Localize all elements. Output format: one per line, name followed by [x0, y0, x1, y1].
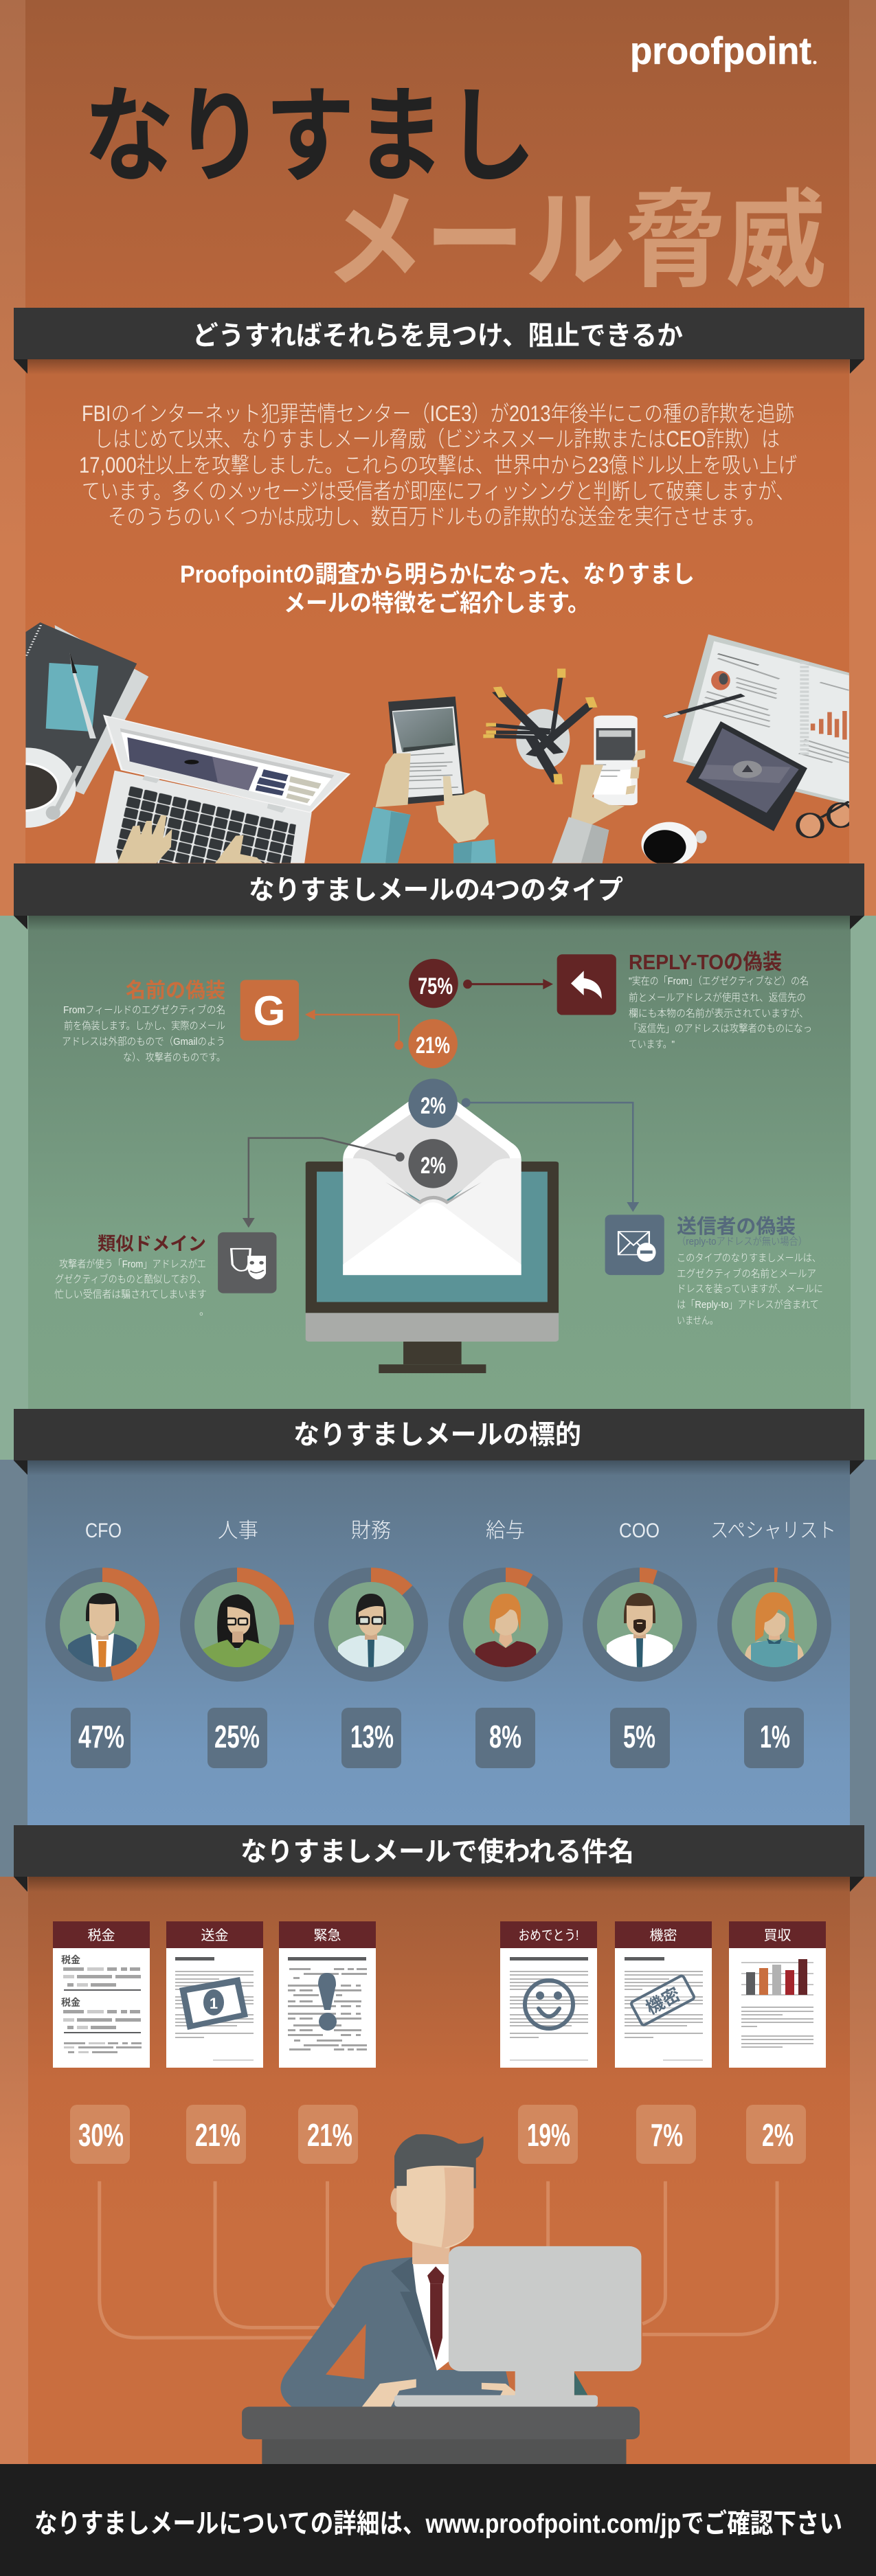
icon: typing hands: [117, 815, 262, 863]
icon: desk: [242, 2407, 640, 2467]
circle: 75%: [409, 959, 458, 1008]
label: 21%: 21%: [416, 1032, 450, 1059]
stat box: 19%: [518, 2105, 578, 2164]
icon: glasses: [798, 802, 853, 837]
banner: targets heading: なりすましメールの標的: [293, 1421, 581, 1450]
stat box: 1%: [744, 1708, 804, 1768]
stat box: 47%: 47%: [78, 1719, 124, 1754]
document: remittance: [166, 1921, 263, 2068]
text block: name spoofing: アドレスは外部のもので（Gmailのよう: [62, 1036, 225, 1048]
stat box: 2%: [746, 2105, 806, 2164]
text block: sender spoofing: エグゼクティブの名前とメールア: [677, 1268, 816, 1280]
connectors: percent lines to person: [100, 2181, 777, 2338]
stat box: 7%: 7%: [651, 2117, 683, 2153]
stat box: 21%: 21%: [195, 2117, 240, 2153]
document: tax: 税金: [61, 1997, 80, 2008]
text block: reply-to spoofing: 前とメールアドレスが使用され、返信先の: [629, 992, 806, 1004]
document: tax: 税金: [88, 1928, 115, 1943]
circle: 2% blue: [408, 1078, 458, 1128]
document: tax: 税金: [61, 1954, 80, 1965]
panel: green background: [0, 916, 876, 1460]
icon: report binder: [665, 634, 849, 805]
icon: phone in hand: [552, 716, 645, 863]
document: acquisition: 買収: [764, 1928, 791, 1943]
label: 2% lower: 2%: [420, 1153, 446, 1179]
labels: job titles: [85, 1519, 836, 1542]
stat box: 21%: [186, 2105, 246, 2164]
text block: sender spoofing: [677, 1215, 823, 1326]
text block: name spoofing: 名前の偽装: [126, 980, 225, 1002]
avatar: payroll 8%: [449, 1568, 563, 1682]
document: confidential: [615, 1921, 712, 2068]
text block: reply-to spoofing: [629, 950, 812, 1050]
stat box: 21% second: 21%: [307, 2117, 352, 2153]
text block: sender spoofing: 送信者の偽装: [677, 1215, 796, 1238]
text block: introduction: そのうちのいくつかは成功し、数百万ドルもの詐欺的な送金を実行させます。: [108, 504, 765, 529]
banner: subject lines heading: なりすましメールで使われる件名: [240, 1838, 634, 1867]
illustration: monitor and envelope: [218, 954, 664, 1373]
stat box: 1%: 1%: [760, 1719, 790, 1754]
labels: job titles: COO: [619, 1519, 660, 1542]
labels: job titles: 財務: [351, 1519, 391, 1542]
document: acquisition: [729, 1921, 826, 2068]
person: hands: [362, 2379, 517, 2407]
text block: lookalike domain: グゼクティブのものと酷似しており、: [55, 1274, 206, 1285]
text block: proofpoint research: Proofpointの調査から明らかになった、なりすまし: [180, 561, 695, 588]
arrow: 21% to name spoofing: [305, 1009, 403, 1050]
text block: sender spoofing: は「Reply-to」アドレスが含まれて: [677, 1299, 819, 1311]
text block: name spoofing: Fromフィールドのエグゼクティブの名: [63, 1004, 225, 1016]
text block: introduction: [79, 401, 797, 529]
stat box: 13%: [341, 1708, 401, 1768]
circle: 2% gray: [408, 1139, 458, 1188]
arrow: 2% to lookalike domain: [243, 1138, 405, 1228]
stat box: 5%: [610, 1708, 670, 1768]
avatar: CFO 47%: [45, 1568, 159, 1682]
text block: lookalike domain: [54, 1234, 210, 1318]
stat box: 7%: [636, 2105, 696, 2164]
boxes: target percentages: [71, 1708, 804, 1768]
text block: sender spoofing: このタイプのなりすましメールは、: [677, 1252, 821, 1264]
stat box: 30%: [70, 2105, 130, 2164]
text block: reply-to spoofing: ています。": [629, 1039, 675, 1050]
panel: blue background: [0, 1460, 876, 1877]
icon: laptop: [95, 716, 349, 863]
icon: coffee cup: [641, 822, 707, 866]
banner: section 1 heading: [14, 308, 864, 374]
text block: reply-to spoofing: REPLY-TOの偽装: [629, 950, 782, 974]
icon: monitor: [306, 1162, 559, 1373]
text block: proofpoint research: メールの特徴をご紹介します。: [284, 590, 589, 617]
document: congratulations: おめでとう!: [518, 1928, 579, 1943]
text block: lookalike domain: 。: [199, 1306, 210, 1318]
stat box: 47%: [71, 1708, 131, 1768]
icon: tablet in hand: [360, 697, 496, 863]
banner: four types heading: [14, 863, 864, 931]
label: 2% top: 2%: [420, 1093, 446, 1119]
stat box: 19%: 19%: [527, 2117, 570, 2153]
avatar: COO 5%: [583, 1568, 697, 1682]
arrow: 2% to sender spoofing: [462, 1098, 639, 1212]
icon: coffee saucer: [25, 747, 82, 828]
icon: G letter: G: [254, 988, 285, 1034]
document: confidential: 機密: [642, 1984, 684, 2018]
icon: theatre masks: [218, 1232, 276, 1293]
icon: notebook and pen: [25, 622, 148, 795]
footer: [0, 2464, 876, 2576]
icon: dark tablet: [686, 721, 807, 831]
document: remittance: 送金: [201, 1928, 228, 1943]
illustration: desk with devices: [0, 622, 853, 866]
illustration: man at desk with computer: [242, 2134, 641, 2467]
text block: sender spoofing: ドレスを装っていますが、メールに: [677, 1283, 823, 1295]
labels: job titles: 給与: [486, 1519, 525, 1542]
boxes: subject percentages: [70, 2105, 806, 2164]
document: congratulations: [500, 1921, 597, 2068]
document: remittance: 1: [210, 1995, 218, 2012]
stat box: 8%: 8%: [489, 1719, 521, 1754]
avatar: finance 13%: [314, 1568, 428, 1682]
title: なりすまし: なりすまし: [84, 78, 536, 195]
text block: name spoofing: 前を偽装します。しかし、実際のメール: [64, 1020, 225, 1032]
person: head: [390, 2134, 484, 2264]
text block: name spoofing: な）、攻撃者のものです。: [123, 1052, 225, 1063]
text block: lookalike domain: 攻撃者が使う「From」アドレスがエ: [59, 1258, 206, 1270]
document: tax: [53, 1921, 150, 2068]
labels: job titles: CFO: [85, 1519, 122, 1542]
text block: name spoofing: [62, 980, 225, 1063]
document: urgent: [279, 1921, 376, 2068]
text block: reply-to spoofing: 欄にも本物の名前が表示されていますが、: [629, 1008, 809, 1019]
text block: sender spoofing: いません。: [677, 1315, 718, 1326]
labels: job titles: 人事: [218, 1519, 258, 1542]
text block: sender spoofing: （reply-toアドレスが無い場合）: [677, 1236, 807, 1247]
circle: 21%: [408, 1019, 458, 1068]
banner: targets heading: [14, 1409, 864, 1476]
banner: four types heading: なりすましメールの4つのタイプ: [249, 876, 623, 905]
icon: computer monitor back: [394, 2246, 641, 2407]
icon: reply: [557, 954, 616, 1015]
stat box: 25%: [207, 1708, 267, 1768]
icon: envelope: [343, 1094, 521, 1275]
text block: reply-to spoofing: "実在の「From」（エグゼクティブなど）の名: [629, 975, 809, 987]
title: メール脅威: メール脅威: [324, 181, 826, 300]
document: confidential: 機密: [650, 1928, 677, 1943]
person: suit and body: [280, 2257, 587, 2407]
panel: lower orange background: [0, 1877, 876, 2467]
avatar: HR 25%: [180, 1568, 294, 1682]
arrow: 75% to reply-to: [463, 979, 553, 989]
icon: envelope with minus: [605, 1214, 664, 1275]
avatar: specialist 1%: [717, 1568, 831, 1682]
panel: top orange background: [0, 0, 876, 916]
stat box: 13%: 13%: [350, 1719, 394, 1754]
stat box: 25%: 25%: [214, 1719, 260, 1754]
text block: proofpoint research: [180, 561, 695, 617]
icon: name box: [240, 980, 299, 1041]
labels: job titles: スペシャリスト: [710, 1519, 836, 1542]
banner: section 1 heading: どうすればそれらを見つけ、阻止できるか: [192, 321, 683, 351]
stat box: 8%: [475, 1708, 535, 1768]
logo: proofpoint: proofpoint: [630, 29, 811, 72]
banner: subject lines heading: [14, 1825, 864, 1892]
stat box: 30%: 30%: [78, 2117, 124, 2153]
text block: lookalike domain: 忙しい受信者は騙されてしまいます: [54, 1289, 207, 1300]
text block: lookalike domain: 類似ドメイン: [98, 1234, 206, 1254]
icon: pencil cup: [483, 668, 594, 784]
label: 75%: 75%: [418, 973, 453, 999]
stat box: 21% second: [298, 2105, 358, 2164]
document: urgent: 緊急: [313, 1928, 341, 1943]
stat box: 5%: 5%: [623, 1719, 655, 1754]
stat box: 2%: 2%: [762, 2117, 794, 2153]
text block: reply-to spoofing: 「返信先」のアドレスは攻撃者のものになっ: [629, 1023, 812, 1035]
